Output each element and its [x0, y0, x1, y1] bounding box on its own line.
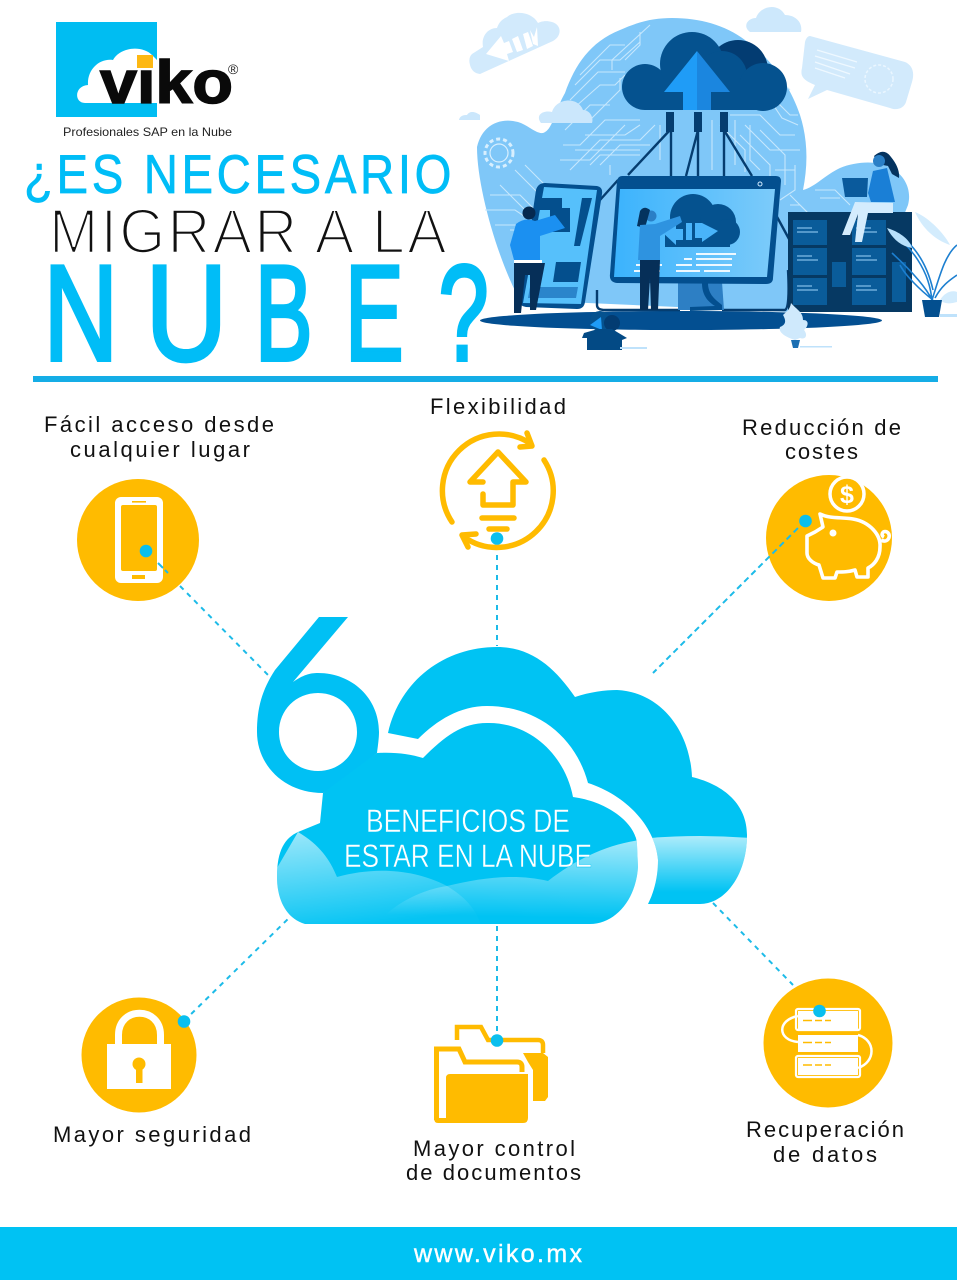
icon: phone [115, 497, 163, 583]
small plant [780, 303, 832, 348]
title: U [146, 237, 227, 389]
icon: upload arrow in cycle [442, 433, 553, 547]
title: MIGRAR A LA [49, 196, 447, 266]
benefit: easy access [44, 412, 274, 601]
benefit: document control: Mayor control [413, 1136, 575, 1161]
title: E [345, 237, 404, 389]
dashed connectors [180, 545, 793, 1040]
man [510, 215, 565, 260]
divider line [33, 376, 938, 382]
gear [485, 139, 513, 167]
connector to cloud [653, 521, 805, 673]
benefit: data recovery: de datos [773, 1142, 877, 1167]
benefit: data recovery [746, 978, 904, 1167]
benefit: easy access: Fácil acceso desde [44, 412, 274, 437]
back cloud shade [652, 836, 747, 890]
logo: viko: ® [228, 61, 239, 77]
cables [597, 112, 795, 310]
benefit: document control: de documentos [406, 1160, 581, 1185]
cloud caption: BENEFICIOS DE [366, 803, 570, 839]
logo: viko: Profesionales SAP en la Nube [63, 125, 232, 139]
benefit: cost reduction: costes [785, 439, 858, 464]
big dark cloud with upload arrow [622, 32, 787, 111]
benefit: cost reduction [653, 415, 901, 673]
benefit: data recovery: Recuperación [746, 1117, 904, 1142]
benefit: security: Mayor seguridad [53, 1122, 251, 1147]
front cloud [277, 723, 638, 924]
title: ? [439, 237, 489, 389]
blue blob backdrop [477, 18, 909, 312]
title: N [44, 237, 118, 389]
circuit pattern [485, 25, 850, 230]
icon: folders [434, 1027, 548, 1123]
central cloud with 6 [257, 617, 750, 930]
icon: piggy bank [807, 514, 889, 578]
phone with man [510, 183, 602, 313]
ground shadow [480, 311, 882, 330]
title: ¿ES NECESARIO [24, 144, 451, 205]
central cloud with 6: ESTAR EN LA NUBE [344, 838, 592, 874]
icon: padlock [107, 1013, 171, 1089]
benefit: easy access: cualquier lugar [70, 437, 250, 462]
title: B [255, 237, 313, 389]
logo: viko: viko [100, 49, 233, 116]
woman at monitor [637, 208, 682, 310]
woman on servers with laptop [842, 152, 899, 242]
back cloud [388, 647, 747, 904]
front cloud highlights [270, 832, 645, 930]
pale floating clouds [469, 13, 560, 74]
icon: server stack [782, 1009, 872, 1077]
benefit: flexibility [430, 394, 566, 547]
potted plant [887, 212, 957, 317]
footer band [0, 1227, 957, 1280]
server racks [788, 212, 912, 312]
footer band: www.viko.mx [413, 1240, 582, 1268]
monitor [610, 176, 781, 311]
title [24, 144, 489, 389]
benefit: flexibility: Flexibilidad [430, 394, 566, 419]
benefit: document control [406, 1027, 581, 1185]
hero illustration: cloud migration [459, 7, 957, 350]
icon: coin: $ [840, 481, 854, 509]
benefit: security [53, 998, 251, 1147]
icon: coin [830, 477, 864, 511]
open box with cloud [582, 311, 647, 350]
benefit: cost reduction: Reducción de [742, 415, 901, 440]
numeral six [257, 617, 379, 793]
logo: viko [56, 22, 239, 139]
